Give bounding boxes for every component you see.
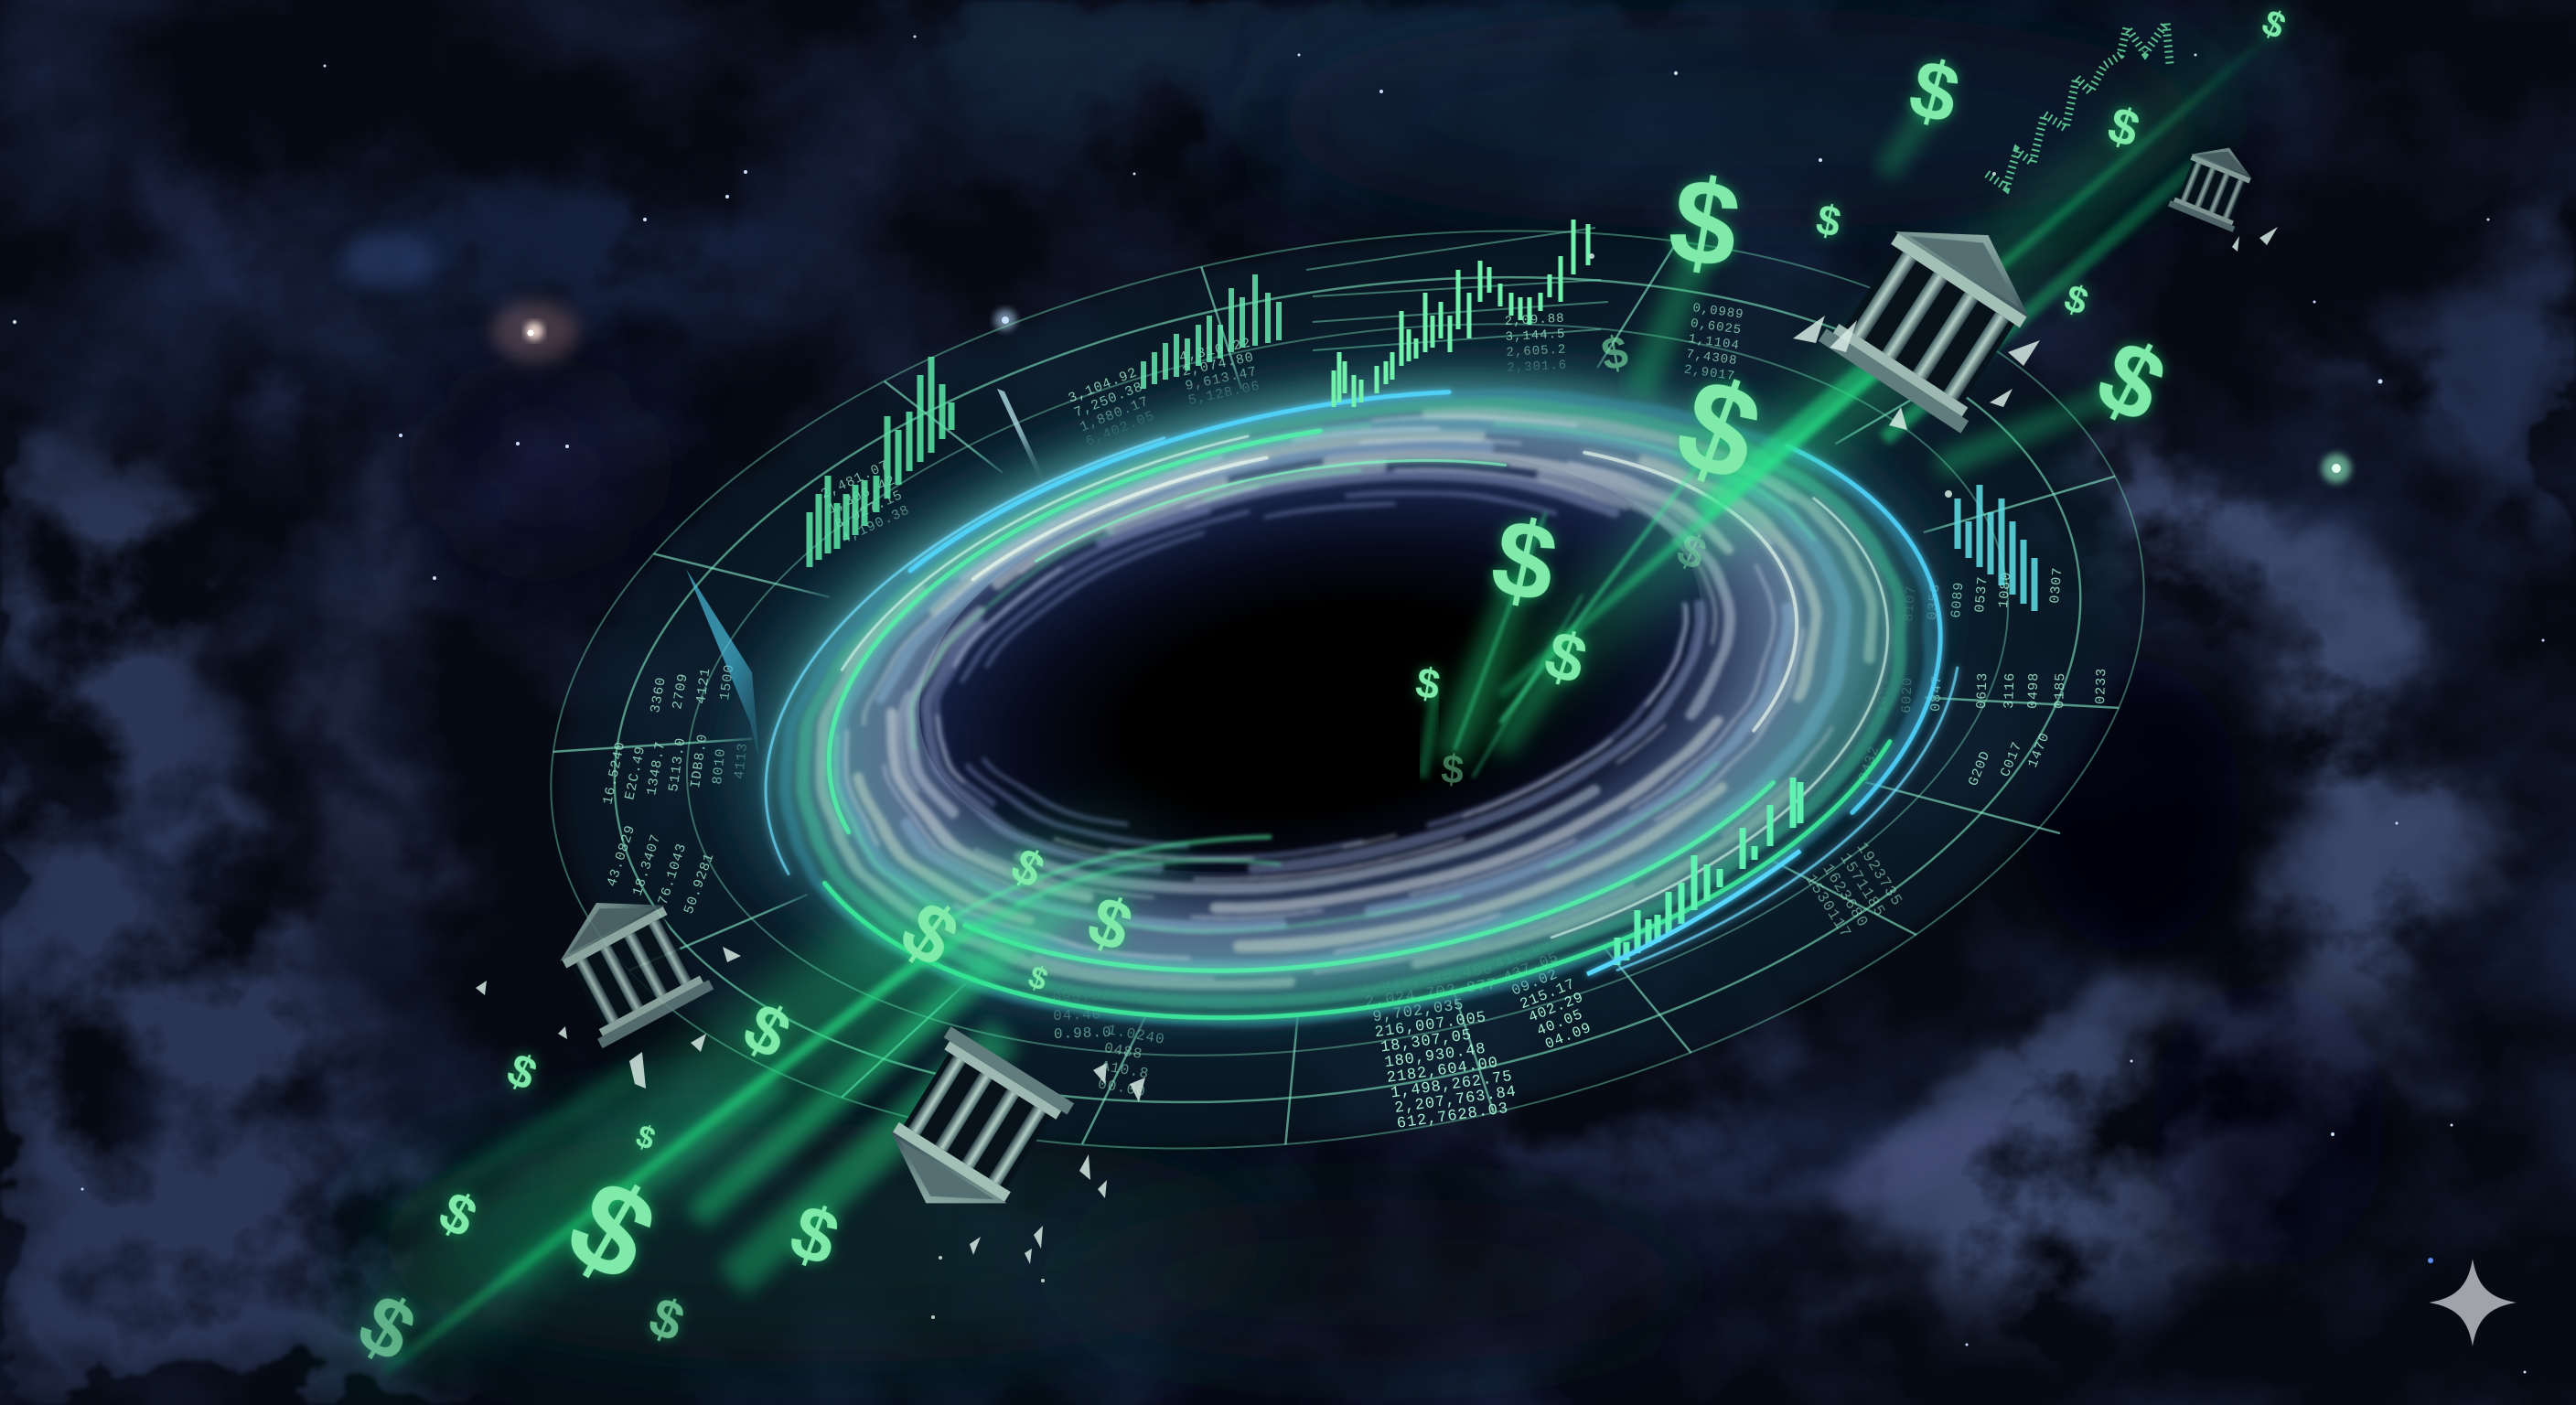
table band: right vertical numbers: 3116: [2002, 672, 2018, 709]
table column: bottom centre: 2,024,702.877: [1364, 976, 1498, 1012]
table column: top centre left: 6,402.05: [1084, 408, 1157, 450]
dollar sign: beam left: $: [499, 1044, 544, 1100]
accretion disk base: [646, 244, 2025, 1137]
table column: top centre left: 1,880.17: [1078, 393, 1152, 435]
table band: right vertical numbers: 0847: [1928, 675, 1945, 712]
table band: right vertical numbers: 6157: [1875, 588, 1894, 626]
shattered debris fragments: [476, 172, 2278, 1319]
table column: top centre: 5,128.06: [1186, 379, 1261, 409]
bank building: left: [541, 874, 714, 1048]
dollar sign: corner: $: [2256, 2, 2292, 48]
table band: right vertical numbers: 1080: [1996, 571, 2014, 608]
beam: upper-right main: [1464, 0, 2305, 732]
table column: bottom centre: 6,92,925.016: [1350, 933, 1475, 968]
table band: right vertical numbers: 0353: [1925, 583, 1943, 620]
table column: bottom right: 437.05: [1501, 949, 1562, 986]
table band: right vertical numbers: 0185: [2052, 672, 2068, 709]
table column: top centre left: 3,104.92: [1067, 365, 1140, 407]
dollar sign: top centre: $: [1660, 151, 1750, 295]
green fine streaks: [792, 349, 1892, 1043]
table column: bottom centre: 18,307,05: [1379, 1027, 1474, 1056]
dollar sign: lower left mid: $: [429, 1180, 487, 1250]
table column: bottom centre: 1,912,280.480: [1360, 961, 1495, 997]
table column: top centre: 9,613.47: [1184, 364, 1259, 394]
table column: bottom centre: 2182,604.00: [1386, 1055, 1499, 1088]
table column: left of centre bottom: 090.02: [1052, 988, 1111, 1006]
chart: top right jagged price line: [1987, 23, 2170, 188]
table column: bottom right: 123.45: [1459, 882, 1519, 919]
table column: bottom centre: 2,207,763.84: [1393, 1083, 1518, 1118]
dollar sign: lower ring small: $: [1002, 837, 1054, 898]
table column: lower far right: 1623680: [1819, 861, 1871, 931]
table band: left vertical numbers: 18.3407: [630, 832, 664, 898]
table band: right vertical numbers: 5103: [1852, 590, 1870, 627]
table column: left of centre bottom: 04.40: [1053, 1006, 1102, 1024]
sparkle watermark icon: [2429, 1259, 2517, 1346]
table band: right vertical numbers: 0233: [2093, 668, 2109, 704]
accretion disk swirl streaks: [734, 311, 1981, 1107]
table band: left vertical numbers: 8010: [710, 747, 729, 786]
table column: left of centre bottom: 41.08: [1052, 970, 1100, 988]
table band: right vertical numbers: 0613: [1974, 672, 1991, 709]
table column: lower right: 443.07: [1621, 876, 1676, 917]
bright nebula star: [491, 302, 2351, 483]
panel: outer data disc: [478, 113, 2217, 1266]
table column: bottom right: 40.05: [1534, 1006, 1585, 1039]
table column: bottom centre: 612,7628.03: [1396, 1100, 1510, 1133]
table band: right vertical numbers: G20D: [1966, 748, 1994, 788]
table column: lower far right: 1923735: [1852, 840, 1905, 910]
table column: bottom right: 480.37: [1476, 908, 1536, 946]
table column: top right: 2,09.88: [1504, 312, 1565, 329]
table column: top centre: 4,310.22: [1178, 336, 1252, 366]
table band: left vertical numbers: E2C.49: [622, 745, 649, 801]
chart: top-left bar cluster: [1143, 274, 1279, 389]
dollar sign: faint on ring: $: [1669, 523, 1714, 580]
candlestick bars: [1334, 220, 1588, 407]
table column: bottom centre: 1,498,262.75: [1390, 1068, 1514, 1102]
dollar sign: top right: $: [2101, 95, 2146, 158]
table column: upper left: 2,481.07: [819, 457, 892, 503]
table band: right vertical numbers: C017: [1998, 739, 2026, 779]
dollar sign: beam large: $: [545, 1150, 679, 1310]
table band: right vertical numbers: 0432: [1856, 744, 1883, 784]
table column: bottom right: 100.04: [1467, 896, 1528, 932]
table column: lower right: 021.09: [1613, 863, 1668, 904]
table band: left vertical numbers: 3360: [648, 676, 670, 714]
soft white and lavender swirl: [734, 311, 1981, 1107]
dollar sign: right large: $: [2080, 317, 2183, 445]
table band: left vertical numbers: 50.9281: [682, 851, 718, 917]
table column: bottom left: 0488: [1103, 1040, 1144, 1063]
table column: upper left: 4,190.38: [840, 502, 912, 547]
table column: lower right: 0012.55: [1582, 805, 1645, 850]
table band: left vertical numbers: 1348.7: [644, 740, 669, 797]
table band: left vertical numbers: 1500: [717, 663, 738, 702]
table band: right vertical numbers: 0317: [1828, 677, 1844, 713]
table column: left of centre bottom: 0.98.0: [1054, 1024, 1112, 1043]
table column: bottom centre: 216,007.005: [1374, 1009, 1487, 1042]
green light beams: [302, 0, 2305, 1400]
chart: bottom data tables: [600, 301, 2109, 1136]
bank building: lower centre, inverted: [864, 1026, 1074, 1241]
bright shard line: upper left: [997, 389, 1054, 499]
table column: upper left: 1,306.42: [826, 473, 898, 518]
chart: left rising bars: [810, 357, 951, 567]
dollar sign: lower ring left: $: [885, 884, 974, 985]
table band: left vertical numbers: 5113.0: [666, 736, 689, 793]
table column: right upper: 0,0989: [1691, 301, 1744, 323]
dollar signs: [343, 2, 2292, 1380]
table column: bottom centre: 180,930.48: [1383, 1041, 1487, 1072]
table column: bottom right: 215.17: [1518, 976, 1578, 1013]
table band: right vertical numbers: 6020: [1899, 677, 1916, 713]
beam: trails into the hole: [1422, 448, 1711, 778]
dollar sign: falling big: $: [1482, 494, 1567, 627]
table band: left vertical numbers: 16.5240: [600, 740, 628, 806]
accretion disk bright rings: [714, 298, 2012, 1130]
dollar sign: falling mid: $: [1536, 616, 1595, 699]
table band: left vertical numbers: IDB8.0: [688, 733, 711, 789]
table column: upper left: 8,027.15: [832, 488, 906, 532]
bright shard line: left: [686, 569, 759, 759]
table column: lower far right: 1571185: [1835, 851, 1888, 920]
table column: top centre: 2,074.80: [1181, 349, 1256, 381]
dollar sign: faint in hole: $: [1440, 746, 1465, 793]
table column: bottom right: 402.29: [1526, 989, 1586, 1026]
table band: right vertical numbers: 0307: [2047, 566, 2066, 604]
table column: bottom centre: 8,462,301.210: [1356, 946, 1490, 981]
table column: right upper: 0,6025: [1690, 316, 1743, 338]
table band: right vertical numbers: 4103: [1852, 677, 1868, 713]
dollar sign: tiny: $: [1024, 960, 1052, 998]
table column: lower far right: 1530117: [1801, 872, 1854, 942]
table column: lower right: 180.74: [1605, 850, 1660, 890]
table band: right vertical numbers: 1082: [1875, 677, 1892, 713]
table column: lower right: 041.28: [1597, 836, 1652, 877]
dollar sign: lower middle: $: [780, 1187, 850, 1282]
table column: bottom left: 00.00: [1097, 1076, 1147, 1100]
table band: right vertical numbers: 0498: [2025, 672, 2042, 709]
dollar sign: bottom left: $: [343, 1276, 431, 1380]
table column: right upper: 2,9017: [1683, 362, 1736, 384]
table band: left vertical numbers: 76.1043: [656, 842, 690, 907]
table column: bottom right: 04.09: [1543, 1019, 1594, 1053]
funnel streaks: [909, 428, 1713, 912]
chart: top candlesticks: [1306, 220, 1608, 407]
dollar sign: lower ring right: $: [1078, 881, 1143, 968]
dollar sign: large upper: $: [1900, 42, 1969, 143]
chart: right cyan bars: [1958, 485, 2034, 611]
table column: bottom right: 11.03: [1485, 926, 1535, 960]
table column: top right: 2,605.2: [1506, 343, 1567, 360]
chart: lower right bars: [1587, 778, 1800, 974]
table column: lower right: 300.40: [1590, 822, 1645, 863]
table band: left vertical numbers: 4121: [693, 667, 714, 705]
table band: left vertical numbers: 43.0829: [605, 823, 639, 889]
black hole funnel: [886, 391, 1734, 929]
table column: right upper: 7,4308: [1685, 348, 1738, 369]
table band: right vertical numbers: [1828, 566, 2109, 788]
table band: right vertical numbers: 1083: [1828, 594, 1846, 631]
table column: bottom centre: 9,702,035: [1371, 996, 1465, 1026]
beam: lower-left main: [302, 837, 1299, 1400]
fine streaks: [780, 342, 1908, 1053]
table column: top centre left: 7,250.38: [1072, 380, 1145, 421]
table column: top right: 2,301.6: [1507, 359, 1568, 376]
table band: left vertical numbers: 2709: [670, 672, 692, 711]
table column: bottom left: 1.0240: [1106, 1022, 1166, 1048]
dollar sign: falling small: $: [1412, 658, 1444, 709]
dollar sign: bottom mid: $: [641, 1285, 692, 1354]
dollar sign: right small: $: [2059, 275, 2094, 324]
dollar sign: faint on top chart: $: [1598, 326, 1632, 381]
bank building: upper right large: [1819, 189, 2059, 434]
dollar sign: beam upper: $: [731, 988, 803, 1075]
dollar sign: ring large: $: [1659, 348, 1778, 511]
table column: right upper: 1,1104: [1688, 332, 1741, 353]
table band: left vertical numbers: 4113: [732, 742, 751, 780]
table band: left vertical numbers: [600, 663, 751, 917]
table column: bottom right: 412.09: [1493, 936, 1552, 972]
dollar sign: beam tiny: $: [631, 1119, 660, 1157]
table column: bottom left: A10.8: [1100, 1058, 1151, 1083]
table column: top right: 3,144.5: [1505, 327, 1566, 345]
table column: bottom right: 09.02: [1509, 966, 1561, 999]
table band: right vertical numbers: 0537: [1972, 575, 1991, 613]
dollar sign: small top: $: [1812, 195, 1845, 246]
table band: right vertical numbers: 1470: [2025, 730, 2054, 770]
table band: right vertical numbers: 8107: [1901, 585, 1919, 622]
bank building: top right small: [2168, 134, 2261, 232]
table band: right vertical numbers: 6089: [1948, 581, 1967, 618]
